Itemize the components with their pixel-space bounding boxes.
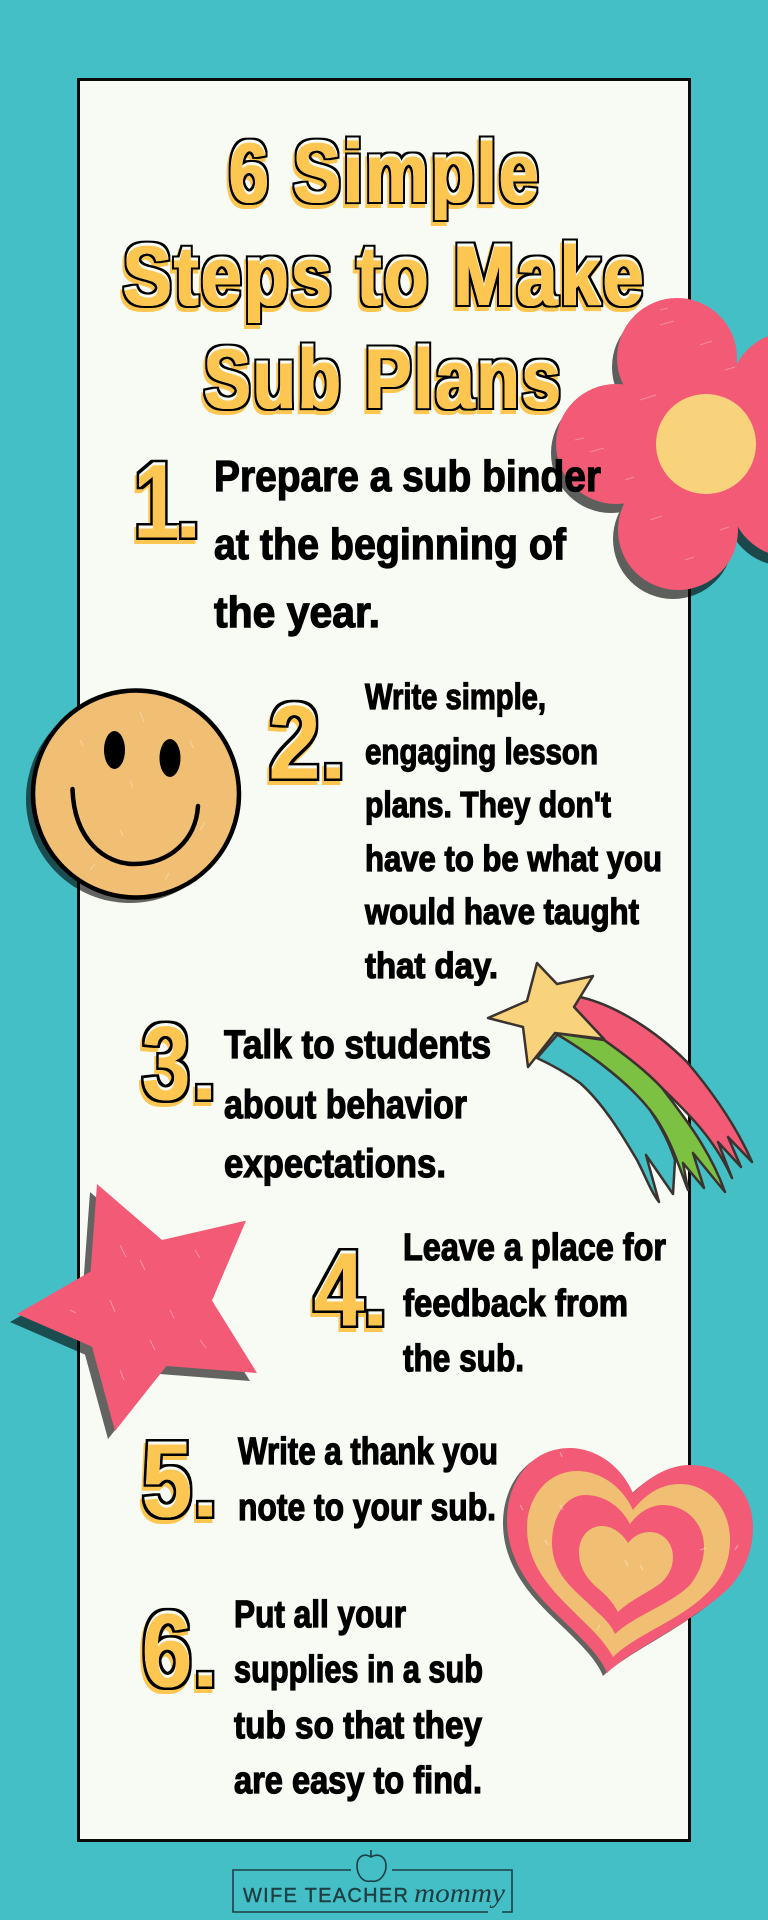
step 5 text: Write a thank you: [238, 1431, 498, 1473]
step 3 text: [224, 1023, 491, 1186]
number 3: 3: [142, 1001, 190, 1122]
number 6: 6: [142, 1588, 192, 1709]
step 6 text: are easy to find.: [234, 1760, 482, 1802]
step 2 text: that day.: [365, 945, 498, 986]
step 5 text: [238, 1431, 498, 1529]
logo wordmark: WIFE TEACHER: [243, 1885, 408, 1907]
icon: flower: [551, 298, 768, 599]
step 5 text: note to your sub.: [238, 1487, 496, 1529]
step 4 text: Leave a place for: [403, 1227, 666, 1269]
step 2 text: engaging lesson: [365, 731, 598, 772]
step 4 text: feedback from: [403, 1283, 628, 1325]
number 6: .: [193, 1606, 217, 1705]
icon: shooting star with rainbow tail: [488, 963, 752, 1202]
title: Sub Plans: [204, 330, 563, 426]
logo: Wife Teacher Mommy: [233, 1850, 512, 1912]
step 3 text: about behavior: [224, 1083, 467, 1127]
step 6 text: tub so that they: [234, 1705, 482, 1747]
number 3: .: [192, 1019, 216, 1118]
title: [123, 124, 646, 426]
number 5: .: [193, 1436, 217, 1535]
step 6 text: [234, 1594, 483, 1802]
panel: white card: [78, 80, 690, 1840]
step 2 text: would have taught: [364, 891, 639, 932]
step 3 text: Talk to students: [224, 1023, 491, 1067]
step 1 text: at the beginning of: [214, 520, 566, 569]
step 6 text: Put all your: [234, 1594, 406, 1636]
step 6 text: supplies in a sub: [234, 1649, 483, 1691]
logo wordmark: mommy: [414, 1878, 505, 1908]
step 2 text: Write simple,: [365, 676, 546, 717]
icon: apple: [357, 1850, 386, 1881]
step 2 text: plans. They don't: [365, 784, 611, 825]
number 2: 2: [269, 680, 320, 801]
icon: smiley face: [26, 690, 239, 903]
number 2: .: [321, 698, 345, 797]
icon: pink star: [10, 1184, 257, 1439]
number 1: .: [176, 457, 200, 556]
title: Steps to Make: [123, 227, 646, 323]
step 1 text: the year.: [214, 588, 380, 637]
step 1 text: Prepare a sub binder: [214, 452, 601, 501]
step 4 text: [403, 1227, 666, 1380]
number 5: 5: [142, 1418, 192, 1539]
number 4: .: [363, 1245, 387, 1344]
step 2 text: [364, 676, 662, 986]
number 4: 4: [314, 1227, 364, 1348]
step 1 text: [214, 452, 601, 637]
title: 6 Simple: [229, 124, 541, 220]
step 3 text: expectations.: [224, 1142, 446, 1186]
step 2 text: have to be what you: [365, 838, 662, 879]
logo wordmark: [243, 1878, 505, 1908]
icon: layered heart: [503, 1448, 753, 1676]
step 4 text: the sub.: [403, 1338, 524, 1380]
number 1: 1: [134, 439, 180, 560]
